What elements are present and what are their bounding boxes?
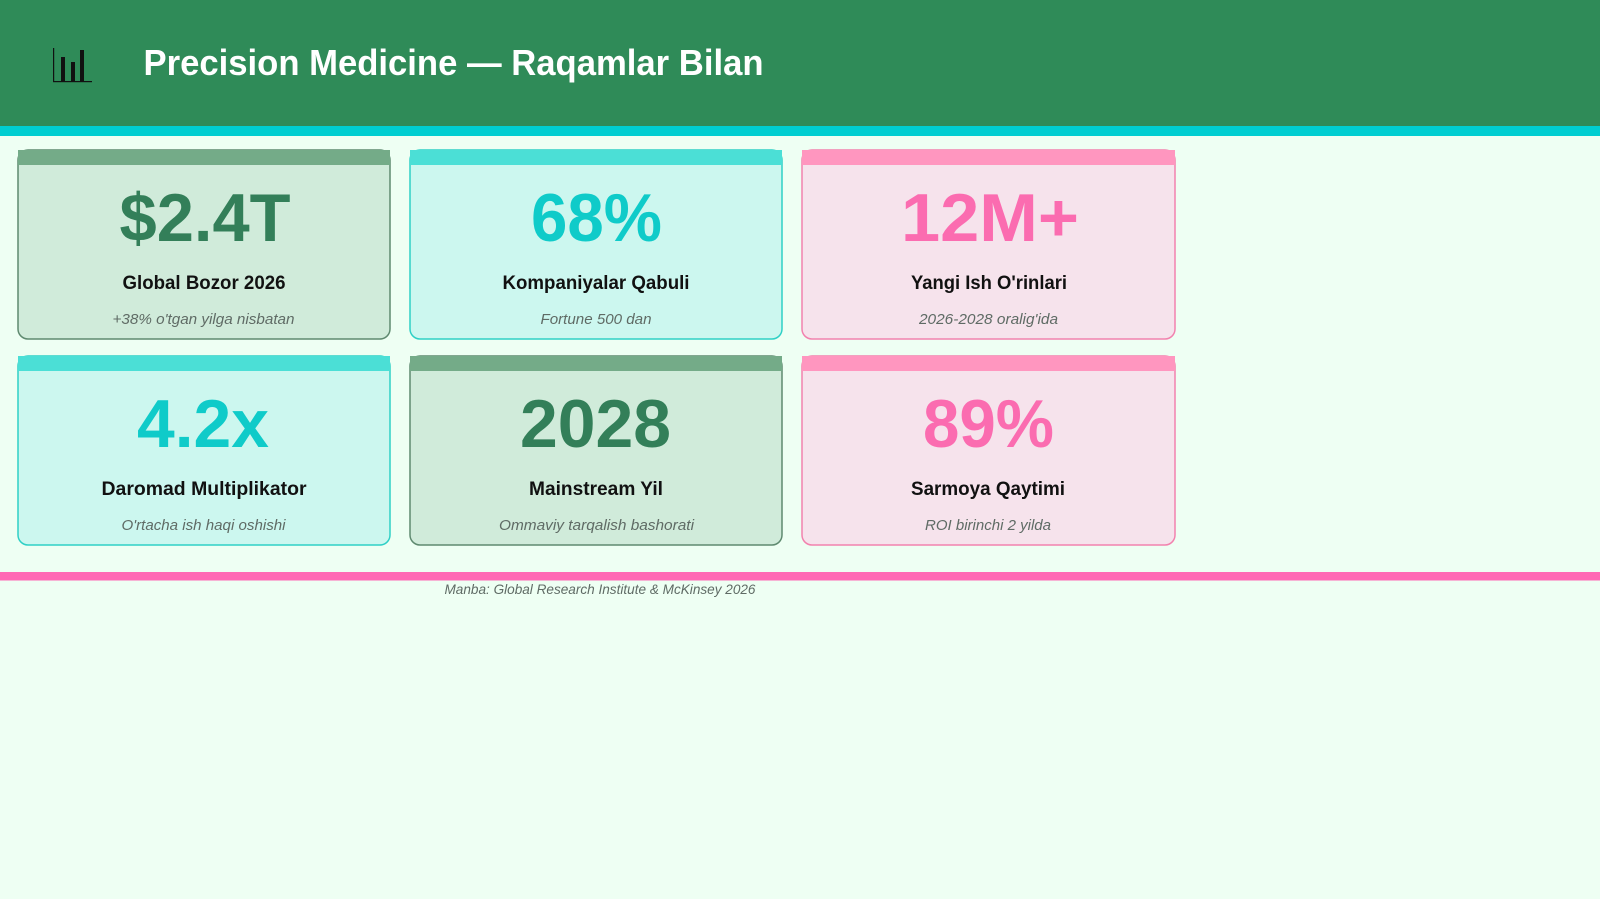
card: mainstream year: 2028 [520, 386, 671, 462]
card: income multiplier: 4.2x [137, 386, 269, 462]
card: company adoption: Fortune 500 dan [540, 311, 652, 328]
source note: Manba: Global Research Institute & McKinsey 2026 [444, 581, 756, 597]
card: return on investment: 89% [923, 386, 1054, 462]
card: global market: +38% o'tgan yilga nisbatan [112, 311, 294, 328]
card: return on investment [802, 356, 1175, 545]
footer accent bar [0, 572, 1600, 580]
card: mainstream year: Mainstream Yil [529, 479, 663, 500]
card: return on investment: ROI birinchi 2 yilda [925, 517, 1051, 534]
card: global market [18, 150, 390, 339]
card: global market: $2.4T [120, 180, 290, 256]
icon: bar chart [53, 48, 92, 82]
card: mainstream year: Ommaviy tarqalish bashorati [499, 517, 695, 534]
card: income multiplier [18, 356, 390, 545]
card: company adoption: 68% [531, 180, 662, 256]
card: return on investment: Sarmoya Qaytimi [911, 479, 1065, 500]
card: mainstream year [410, 356, 782, 545]
card: new jobs [802, 150, 1175, 339]
card: company adoption: Kompaniyalar Qabuli [502, 273, 690, 294]
card: income multiplier: Daromad Multiplikator [102, 479, 307, 500]
title: Precision Medicine — Raqamlar Bilan [144, 42, 764, 83]
card: new jobs: 12M+ [901, 180, 1079, 256]
card: new jobs: 2026-2028 oralig'ida [918, 311, 1058, 328]
header band [0, 0, 1600, 136]
card: global market: Global Bozor 2026 [122, 273, 286, 294]
card: income multiplier: O'rtacha ish haqi oshishi [122, 517, 286, 534]
card: company adoption [410, 150, 782, 339]
card: new jobs: Yangi Ish O'rinlari [911, 273, 1067, 294]
